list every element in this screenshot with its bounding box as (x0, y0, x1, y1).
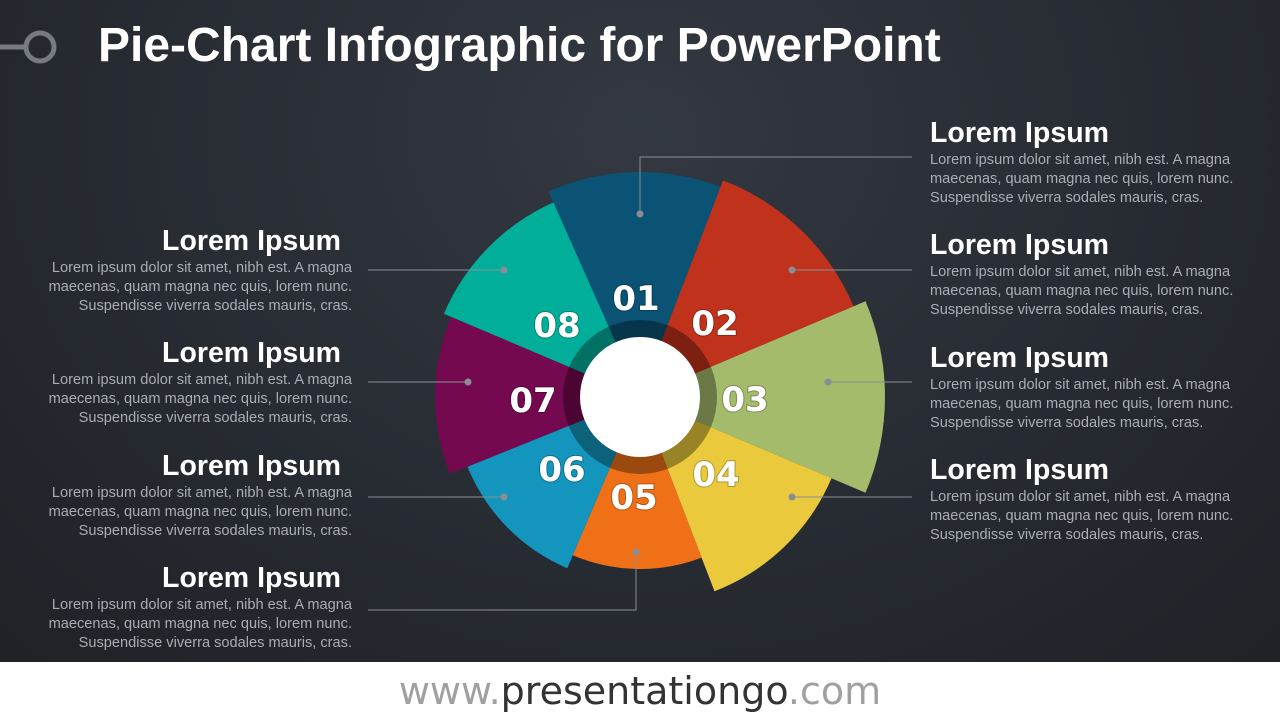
text: left 4: maecenas, quam magna nec quis, lorem nunc. (49, 616, 352, 632)
text: left 1 (49, 225, 352, 314)
segment numbers: 05 (610, 478, 658, 518)
text: right 3: maecenas, quam magna nec quis, lorem nunc. (930, 396, 1233, 412)
title: Pie-Chart Infographic for PowerPoint (98, 19, 941, 72)
text: left 1: Lorem ipsum dolor sit amet, nibh est. A magna (52, 260, 352, 276)
text: right 3: Suspendisse viverra sodales mauris, cras. (930, 415, 1203, 431)
text: left 2: Lorem Ipsum (162, 337, 341, 369)
text: left 3: Lorem Ipsum (162, 450, 341, 482)
text: right 1: Lorem Ipsum (930, 117, 1109, 149)
segment numbers: 04 (692, 455, 740, 495)
text: right 3 (930, 342, 1233, 431)
text: right 2 (930, 229, 1233, 318)
text: right 2: Lorem ipsum dolor sit amet, nibh est. A magna (930, 264, 1230, 280)
segment numbers (509, 279, 769, 518)
text: right 4: Suspendisse viverra sodales mauris, cras. (930, 527, 1203, 543)
text: left 4: Lorem ipsum dolor sit amet, nibh est. A magna (52, 597, 352, 613)
text: right 3: Lorem Ipsum (930, 342, 1109, 374)
text: left 1: Lorem Ipsum (162, 225, 341, 257)
text: left 2: Lorem ipsum dolor sit amet, nibh est. A magna (52, 372, 352, 388)
text: right 4 (930, 454, 1233, 543)
text: right 2: maecenas, quam magna nec quis, lorem nunc. (930, 283, 1233, 299)
segment numbers: 01 (612, 279, 660, 319)
text: left 3: maecenas, quam magna nec quis, lorem nunc. (49, 504, 352, 520)
text: right 4: Lorem ipsum dolor sit amet, nibh est. A magna (930, 489, 1230, 505)
text: right 1: Lorem ipsum dolor sit amet, nibh est. A magna (930, 152, 1230, 168)
text: right 2: Suspendisse viverra sodales mauris, cras. (930, 302, 1203, 318)
segment numbers: 08 (533, 306, 581, 346)
text: right 2: Lorem Ipsum (930, 229, 1109, 261)
text: right 1 (930, 117, 1233, 206)
connector lines (368, 157, 912, 610)
segment numbers: 03 (721, 380, 769, 420)
segment numbers: 07 (509, 381, 557, 421)
text: left 1: Suspendisse viverra sodales mauris, cras. (79, 298, 352, 314)
text: left 2 (49, 337, 352, 426)
text: left 4: Suspendisse viverra sodales mauris, cras. (79, 635, 352, 651)
text: right 1: maecenas, quam magna nec quis, lorem nunc. (930, 171, 1233, 187)
text: left 1: maecenas, quam magna nec quis, lorem nunc. (49, 279, 352, 295)
text: left 2: maecenas, quam magna nec quis, lorem nunc. (49, 391, 352, 407)
text: left 4: Lorem Ipsum (162, 562, 341, 594)
text: left 4 (49, 562, 352, 651)
text: right 4: Lorem Ipsum (930, 454, 1109, 486)
text: right 3: Lorem ipsum dolor sit amet, nibh est. A magna (930, 377, 1230, 393)
text: left 2: Suspendisse viverra sodales mauris, cras. (79, 410, 352, 426)
segment numbers: 06 (538, 450, 586, 490)
text: right 1: Suspendisse viverra sodales mauris, cras. (930, 190, 1203, 206)
text: left 3 (49, 450, 352, 539)
text: left 3: Suspendisse viverra sodales mauris, cras. (79, 523, 352, 539)
text: left 3: Lorem ipsum dolor sit amet, nibh est. A magna (52, 485, 352, 501)
footer (0, 662, 1280, 720)
segment numbers: 02 (691, 304, 739, 344)
text: right 4: maecenas, quam magna nec quis, lorem nunc. (930, 508, 1233, 524)
footer: www.presentationgo.com (399, 669, 881, 713)
icon: key ring (0, 30, 56, 64)
